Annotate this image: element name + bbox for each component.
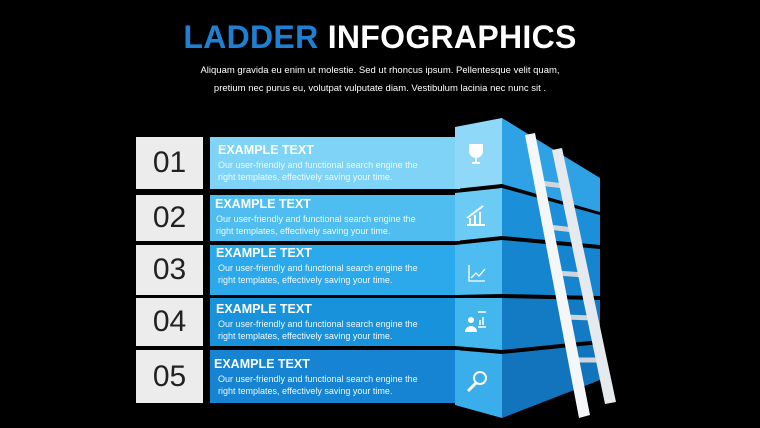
text: Our user-friendly and functional search engine the — [216, 214, 416, 224]
text: right templates, effectively saving your time. — [218, 331, 392, 341]
row 2 — [136, 195, 416, 241]
text: Our user-friendly and functional search engine the — [218, 374, 418, 384]
text: right templates, effectively saving your time. — [218, 172, 392, 182]
subtitle: Aliquam gravida eu enim ut molestie. Sed ut rhoncus ipsum. Pellentesque velit quam, — [200, 65, 560, 76]
text: 05 — [153, 360, 186, 393]
text: right templates, effectively saving your time. — [218, 386, 392, 396]
title: LADDER INFOGRAPHICS — [183, 19, 577, 55]
subtitle: pretium nec purus eu, volutpat vulputate diam. Vestibulum lacinia nec nunc sit . — [214, 83, 546, 94]
subtitle — [200, 65, 560, 94]
text: 04 — [153, 305, 186, 338]
row 5 — [136, 350, 418, 403]
text: 03 — [153, 253, 186, 286]
text: 01 — [153, 146, 186, 179]
block side faces — [502, 118, 600, 418]
row bands — [210, 137, 460, 403]
text: EXAMPLE TEXT — [218, 143, 314, 157]
text: Our user-friendly and functional search engine the — [218, 319, 418, 329]
row 3 — [136, 245, 418, 295]
row 1 — [136, 137, 418, 189]
text: right templates, effectively saving your time. — [216, 226, 390, 236]
block front faces — [455, 118, 502, 418]
text: Our user-friendly and functional search engine the — [218, 160, 418, 170]
ladder — [525, 133, 616, 418]
row 4 — [136, 298, 418, 346]
text: 02 — [153, 201, 186, 234]
text: EXAMPLE TEXT — [214, 357, 310, 371]
text: EXAMPLE TEXT — [216, 246, 312, 260]
text: EXAMPLE TEXT — [216, 302, 312, 316]
text: right templates, effectively saving your time. — [218, 275, 392, 285]
text: Our user-friendly and functional search engine the — [218, 263, 418, 273]
icons — [465, 145, 486, 391]
text: EXAMPLE TEXT — [215, 197, 311, 211]
